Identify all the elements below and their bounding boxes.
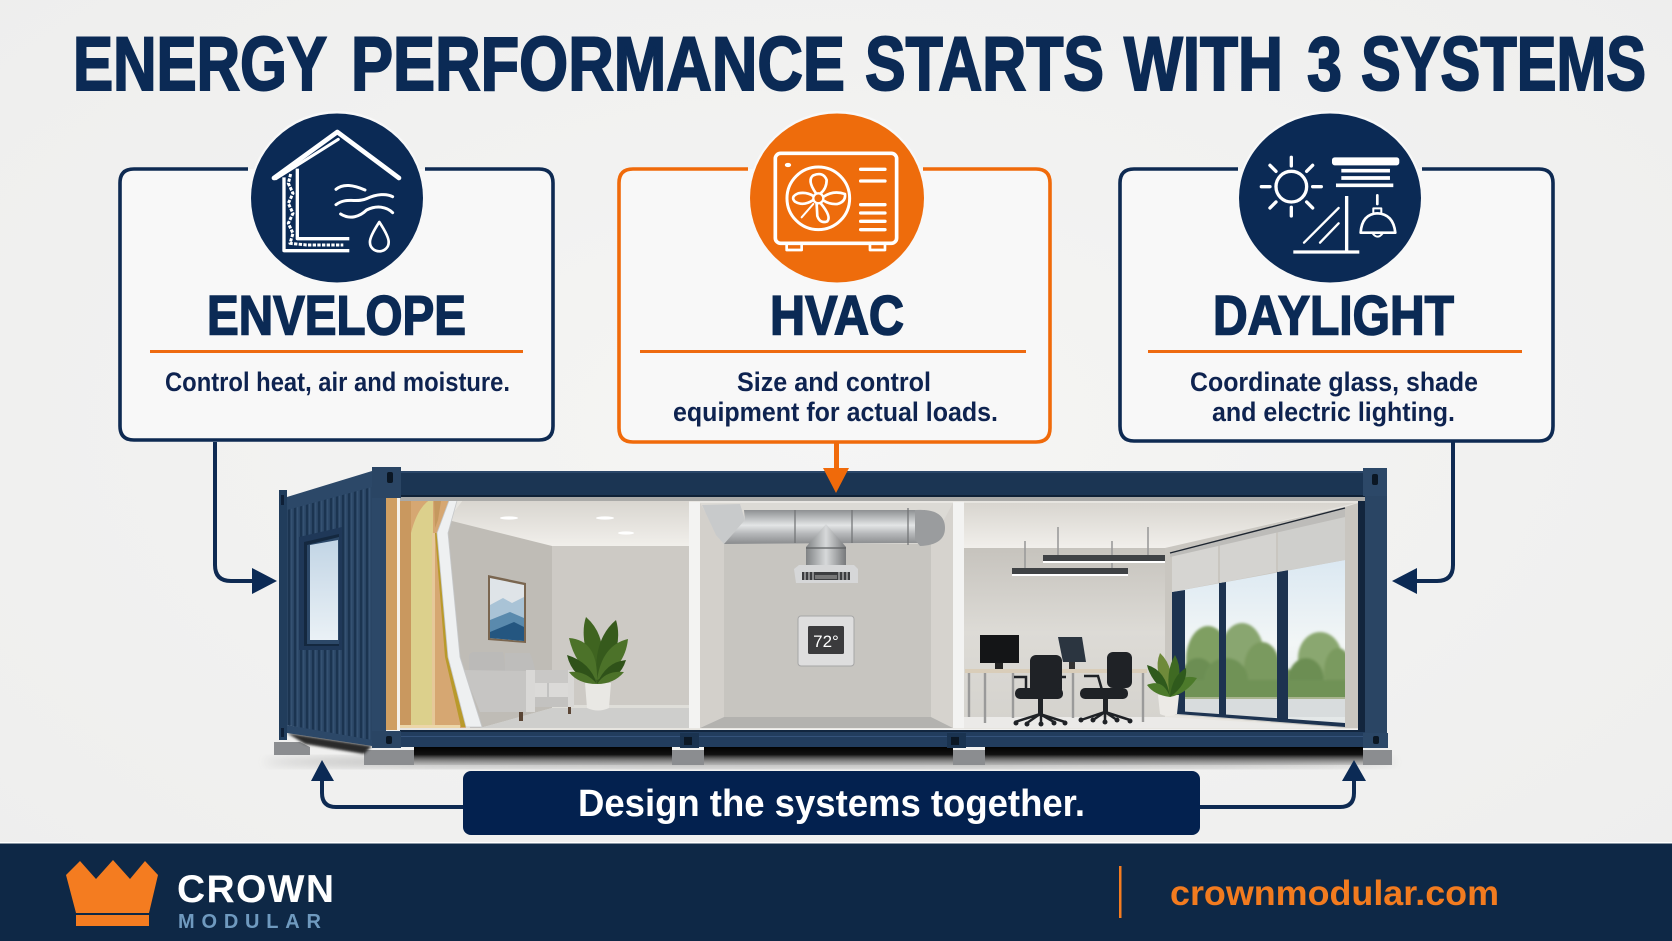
logo wordmark: CROWN — [177, 868, 334, 911]
ductwork — [702, 504, 945, 565]
callout: design the systems together — [463, 771, 1200, 835]
desk with monitors — [965, 635, 1147, 723]
arrow: callout to left of container — [311, 760, 463, 807]
title: STARTS — [865, 22, 1104, 107]
ground shadow — [265, 756, 1395, 768]
office plant — [1147, 653, 1197, 716]
ceiling diffuser — [794, 565, 858, 583]
bottom beam — [400, 730, 1365, 748]
under-floor shadow — [287, 733, 1363, 765]
panel: envelope — [120, 111, 553, 440]
hvac card outline — [619, 169, 1050, 442]
thermostat — [798, 616, 854, 666]
vapour membrane — [437, 479, 482, 727]
footer band — [0, 842, 1672, 941]
ceiling lights — [500, 516, 634, 535]
container end face — [279, 471, 372, 746]
hvac description — [673, 367, 998, 427]
website link: crownmodular.com — [1170, 874, 1499, 913]
framed mountain picture — [488, 575, 526, 643]
top beam — [400, 471, 1365, 501]
arrow: callout to right of container — [1200, 760, 1366, 807]
hvac description: Size and control — [737, 367, 931, 397]
sofa — [463, 652, 574, 721]
panel: hvac — [619, 111, 1050, 442]
room: mechanical — [689, 501, 964, 729]
logo wordmark: MODULAR — [178, 911, 322, 933]
arrow: envelope to container — [215, 442, 277, 594]
envelope card outline — [120, 169, 553, 440]
icon: sun, shade, glass and lamp — [1237, 111, 1423, 285]
daylight description: and electric lighting. — [1212, 397, 1455, 427]
title: PERFORMANCE — [351, 22, 845, 107]
room: open office — [964, 501, 1365, 729]
hvac heading: HVAC — [770, 284, 904, 346]
side window — [299, 527, 342, 650]
title: WITH — [1124, 22, 1283, 107]
daylight description: Coordinate glass, shade — [1190, 367, 1478, 397]
daylight description — [1190, 367, 1478, 427]
daylight heading: DAYLIGHT — [1213, 284, 1454, 346]
arrow: hvac to container — [823, 443, 849, 493]
rear corner post — [1358, 468, 1388, 748]
callout: design the systems together: Design the systems together. — [578, 783, 1085, 825]
wall section: insulation layers — [386, 479, 467, 730]
title — [73, 22, 1646, 107]
pendant lights — [1012, 527, 1165, 576]
office chairs — [1014, 652, 1132, 726]
envelope description: Control heat, air and moisture. — [165, 367, 510, 397]
room: lounge — [400, 497, 700, 730]
daylight card outline — [1120, 169, 1553, 441]
window wall — [1165, 503, 1358, 728]
yellow foil layer — [435, 533, 467, 727]
logo wordmark — [177, 868, 334, 933]
foot blocks — [274, 742, 1392, 765]
arrow: daylight to container — [1392, 442, 1453, 594]
front corner post — [372, 467, 401, 748]
hvac description: equipment for actual loads. — [673, 397, 998, 427]
panel: daylight — [1120, 111, 1553, 441]
logo: crown — [66, 860, 158, 926]
thermostat: 72° — [813, 632, 839, 651]
icon: outdoor air-conditioning unit — [748, 111, 926, 285]
roller shades — [1170, 507, 1345, 592]
potted plant — [567, 617, 628, 710]
title: ENERGY — [73, 22, 327, 107]
icon: insulated house with moisture — [249, 111, 425, 285]
title: 3 — [1307, 22, 1342, 107]
envelope heading: ENVELOPE — [207, 284, 466, 346]
modular container cutaway illustration — [265, 467, 1395, 768]
